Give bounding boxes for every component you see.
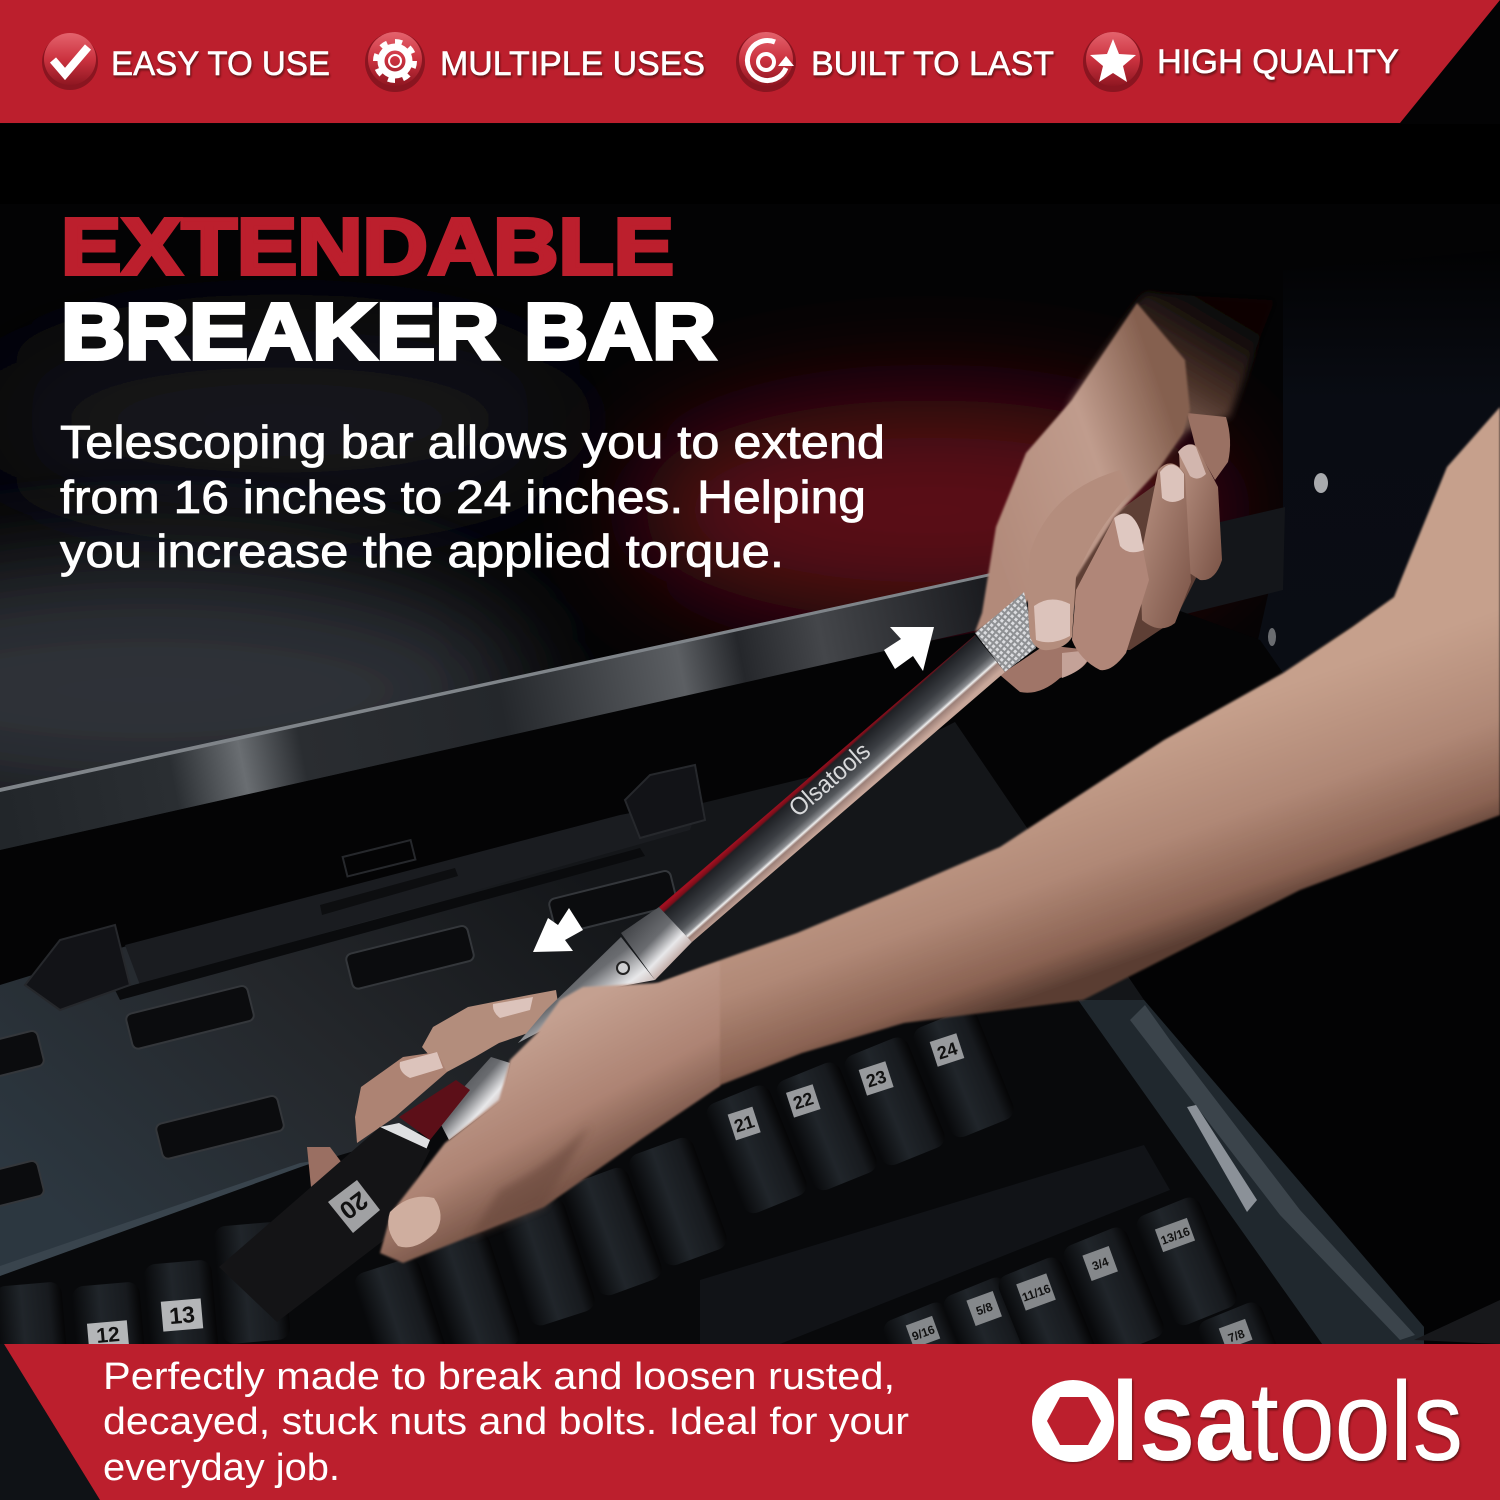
metric sockets: 23 [864,1066,889,1092]
label: easy to use: EASY TO USE [111,45,330,83]
description text: you increase the applied torque. [60,525,784,577]
pinky nail [1062,650,1090,678]
grey-blue toolbox front [0,560,530,820]
hinges [25,765,705,1010]
left sockets [0,1135,730,1405]
thumb nail [1034,599,1070,642]
rail stripe [1130,1005,1415,1340]
upper finger nail [493,997,533,1018]
heading [61,202,716,376]
top banner [0,0,1500,123]
red glow on toolbox drawer [630,400,1230,620]
bottom text: decayed, stuck nuts and bolts. Ideal for your [103,1401,909,1443]
socket below banner corner [0,1344,100,1500]
upper hand palm [975,303,1190,632]
label: high quality: HIGH QUALITY [1157,43,1399,81]
steel drawer lip [0,573,1000,850]
metric sockets [703,1006,1017,1217]
shadow between fingers [1070,460,1200,650]
left sockets: 13 [168,1301,196,1329]
heading line 1: EXTENDABLE [61,202,674,291]
heading line 2: BREAKER BAR [61,287,716,376]
pinky beneath bar [1000,645,1090,693]
socket size: 20 [334,1186,373,1225]
socket well [0,960,1322,1344]
bottom text: Perfectly made to break and loosen rusted, [103,1356,895,1398]
lower hand [380,962,720,1263]
ring finger [1179,444,1222,580]
description text [60,416,885,577]
shadow vignette under top banner [0,124,1500,204]
telescoping collar [617,907,692,980]
bottom banner [4,1344,1500,1500]
index nail [1114,514,1144,552]
bottom text: everyday job. [103,1447,340,1489]
imperial sockets: 5/8 [974,1299,995,1318]
icon: cycle gear [736,32,796,92]
telescoping breaker bar tube [659,635,1005,942]
metric sockets: 24 [935,1038,960,1064]
faint dark toolbox shape [0,330,580,510]
logo: Olsatools [1033,1359,1463,1484]
icon: check [42,33,98,90]
brand mark on bar: Olsatools [784,737,876,823]
label: built to last: BUILT TO LAST [811,45,1054,83]
icon: star [1083,32,1143,92]
shirt buttons [1268,473,1328,646]
socket tray lid [0,722,1424,1344]
tray ridge [115,848,645,1000]
hidden back finger [1187,413,1230,480]
thumb nail lower [388,1197,441,1247]
drawer ledge behind hand [1000,507,1285,660]
forearm [640,407,1500,1110]
knurled grip [975,592,1036,672]
thumb crease shadow [470,1125,590,1237]
imperial sockets: 3/4 [1090,1254,1111,1273]
icon: gear [365,32,425,92]
label: multiple uses: MULTIPLE USES [440,45,705,83]
tray right rail [1078,1000,1424,1344]
left sockets: 12 [95,1323,121,1348]
imperial sockets: 9/16 [910,1322,937,1344]
metric sockets: 21 [732,1111,757,1137]
rail label [1187,1105,1257,1212]
arrow: extend down left [533,908,583,952]
tray hinge band [125,800,700,985]
ring nail [1178,444,1206,479]
imperial sockets: 11/16 [1020,1281,1053,1305]
imperial sockets: 13/16 [1159,1224,1192,1248]
tray raised slot [320,868,458,915]
arrow: extend up right [884,627,934,671]
compartment divider [700,1145,1170,1344]
lower hand second finger [355,1052,447,1143]
imperial sockets [880,1194,1302,1434]
description text: Telescoping bar allows you to extend [60,416,885,468]
tray slots [0,870,678,1225]
index finger [1072,515,1149,670]
lip edge highlight [0,571,1000,792]
upper forearm going into shadow [1040,293,1275,500]
middle nail [1160,464,1184,502]
socket label [328,1180,380,1233]
lower corner [1414,1300,1500,1344]
description text: from 16 inches to 24 inches. Helping [60,471,866,523]
imperial sockets: 7/8 [1226,1326,1247,1345]
metric sockets: 22 [791,1088,816,1114]
well rim highlight [0,1160,320,1276]
thumb of upper hand [1028,470,1130,650]
ratchet head [380,1057,510,1150]
lower hand upper finger [422,990,558,1073]
inner ratchet bar [518,937,655,1043]
dark gap below lip [0,600,1283,1010]
middle finger [1140,463,1191,628]
bottom text [103,1356,909,1489]
tucked finger [307,1147,342,1187]
black socket on ratchet [219,1127,430,1322]
second nail [400,1052,443,1078]
navy shirt [1258,250,1500,673]
